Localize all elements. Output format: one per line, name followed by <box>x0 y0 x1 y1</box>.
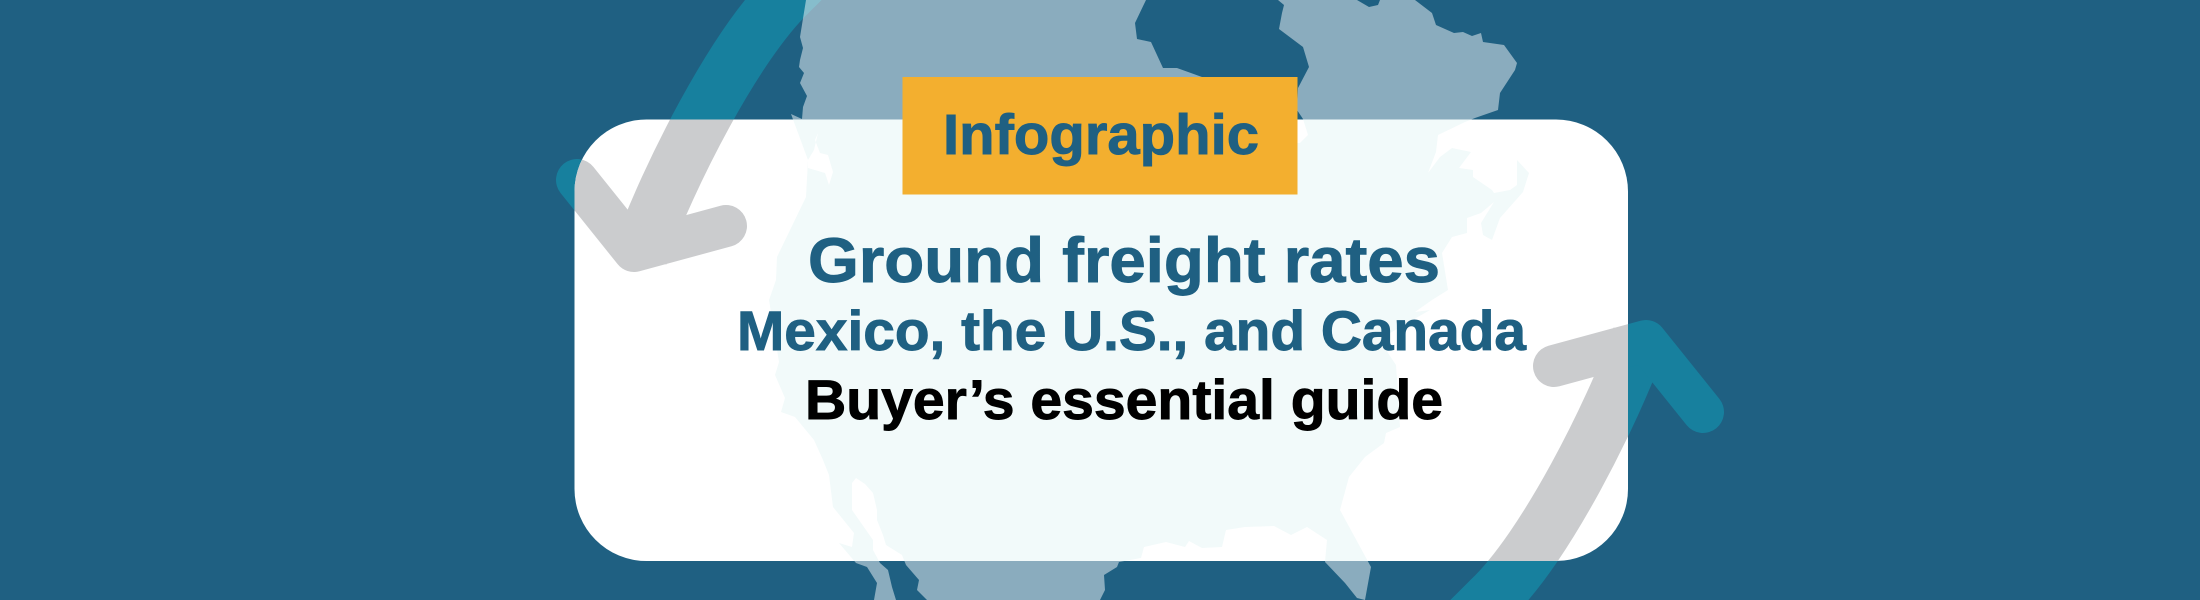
heading: Ground freight rates: Ground freight rates <box>808 226 1440 296</box>
subheading: regions: Mexico, the U.S., and Canada <box>737 299 1527 362</box>
circular arrows: teal portions outside panel <box>577 0 1703 600</box>
badge: Infographic: Infographic <box>943 103 1259 167</box>
subheading: buyer's guide: Buyer’s essential guide <box>805 368 1443 431</box>
panel: white title card <box>574 120 1628 561</box>
map tint inside panel <box>769 120 1529 561</box>
circular arrows: grey portions inside panel <box>574 120 1628 561</box>
badge: Infographic <box>902 77 1298 194</box>
map of North America <box>769 0 1529 600</box>
